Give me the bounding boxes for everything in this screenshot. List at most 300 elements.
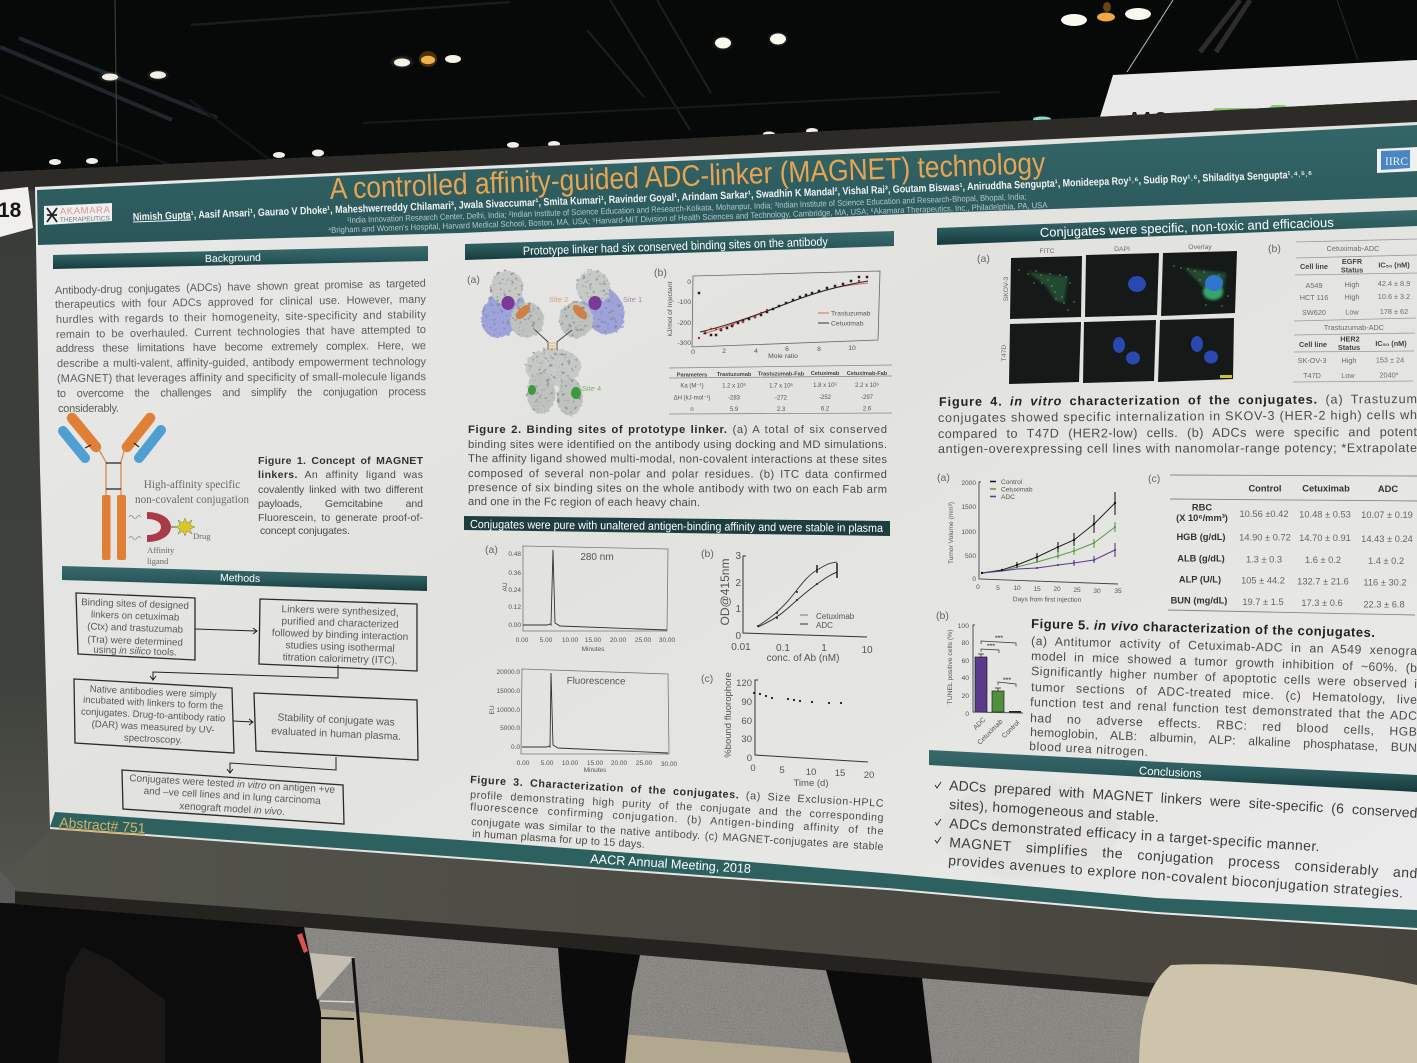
figure 2b: parameters table: -272 [775,396,788,402]
figure 4b: IC50 tables: 42.4 ± 8.9 [1378,279,1410,288]
figure 3a: 280 nm chromatogram: 5.00 [540,637,553,644]
background paragraph: therapeutics with four ADCs approved for clinical use. However, many [55,294,427,311]
section heading: Methods: Methods [220,572,260,585]
figure 3a: 280 nm chromatogram: 0.00 [508,622,521,629]
background paragraph: to overcome the challenges and simplify the conjugation process [57,386,427,400]
figure 3 caption: fluorescence confirming conjugation. (b) Antigen-binding affinity of the [470,801,884,838]
table number tag [0,187,33,237]
figure 2b: ITC chart: -200 [677,320,691,327]
figure 3 caption: conjugate was similar to the native antibody. (c) MAGNET-conjugates are stable [471,816,884,853]
figure 3c: plasma stability scatter: Time (d) [793,778,829,789]
figure 3a: 280 nm chromatogram: AU [502,582,509,592]
conclusions list [935,777,1417,901]
figure 4 caption: conjugates showed specific internalization in SKOV-3 (HER-2 high) cells wh [938,408,1417,425]
section heading: Conjugates were pure: Conjugates were pure with unaltered antigen-binding affinity and were stable in plasma [470,518,884,535]
figure 5a: tumor volume chart: 25 [1073,587,1081,594]
background sign: AAC [1128,109,1167,129]
figure 2b: ITC chart: kJ/mol of Injectant [667,282,674,336]
section heading: Conjugates specific: Conjugates were specific, non-toxic and efficacious [1040,215,1334,240]
figure 4b: IC50 tables: High [1341,356,1357,365]
figure 1: MAGNET linker concept diagram: Drug [193,531,211,541]
figure 5c: hematology table: 14.90 ± 0.72 [1239,532,1291,542]
figure 5 caption: model in mice showed a tumor growth inhibition of ~60%. (b [1031,649,1417,675]
methods flowchart: Linkers were synthesized, [281,604,399,619]
figure 3a: 280 nm chromatogram: 0.36 [508,570,521,577]
figure 2b: parameters table: Ka (M⁻¹) [680,384,704,390]
figure 1 caption [258,455,424,537]
figure 1: MAGNET linker concept diagram: ligand [147,556,169,566]
figure 3a: fluorescence chromatogram: 10.00 [562,760,579,767]
figure 5 caption: Figure 5. in vivo characterization of the conjugates. [1031,616,1375,640]
figure 1 caption: concept conjugates. [260,525,350,537]
logo: IIRC [1377,147,1417,173]
methods flowchart: (Tra) were determined [87,634,183,649]
figure 2b: parameters table: 2.3 [777,407,786,413]
figure 2b: parameters table: 2.2 x 10⁶ [855,382,879,389]
folding chair frame [310,953,362,1063]
figure 5 caption: tumor sections of ADC-treated mice. (c) Hematology, live [1031,680,1417,707]
figure 3b: binding curve: Cetuximab [816,612,855,621]
figure 1: MAGNET linker concept diagram [63,418,249,566]
figure 5 caption: blood urea nitrogen. [1029,739,1148,759]
figure 4b: IC50 tables: 10.6 ± 3.2 [1378,292,1410,301]
figure 2b: parameters table: Trastuzumab [717,372,752,378]
header banner [37,125,1417,245]
figure 3b: binding curve: OD@415nm [718,559,732,625]
figure 2b: ITC chart: Cetuximab [831,320,864,328]
figure 3a: 280 nm chromatogram: 10.00 [562,637,579,644]
figure 5 caption: (a) Antitumor activity of Cetuximab-ADC in an A549 xenogra [1031,634,1417,658]
figure 5a: tumor volume chart [937,472,1122,604]
figure 1 caption: Fluorescein, to generate proof-of- [258,512,424,524]
logo: Akamara: AKAMARA [60,205,111,217]
figure 2a: antibody structure: Site 4 [582,384,601,393]
figure 5a: tumor volume chart: Cetuximab [1001,486,1033,494]
figure 4b: IC50 tables: IC₅₀ (nM) [1378,260,1410,270]
figure 4b: IC50 tables: Cetuximab-ADC [1327,244,1379,253]
figure 4 caption: compared to T47D (HER2-low) cells. (b) ADCs were specific and potent [938,425,1417,441]
figure 1 caption: covalently linked with two different [258,484,423,496]
figure 5c: hematology table: 105 ± 44.2 [1241,576,1285,586]
figure 3a: fluorescence chromatogram: 0.0 [511,744,520,751]
figure 5b: TUNEL bar chart: Cetuximab [976,718,1005,746]
figure 2b: ITC chart: 0 [687,279,691,286]
section heading: Methods [62,566,427,591]
figure 3a: 280 nm chromatogram: 0.48 [508,551,521,558]
poster sheet [35,122,1417,930]
figure 5c: hematology table: 1.4 ± 0.2 [1368,556,1404,566]
figure 2b: ITC chart: 2 [722,348,726,355]
figure 4b: IC50 tables: High [1344,292,1360,302]
figure 2b: parameters table: ΔH (kJ·mol⁻¹) [674,396,710,402]
figure 2b: parameters table: 5.9 [730,407,739,413]
figure 3c: plasma stability scatter: 30 [741,734,752,745]
methods flowchart: followed by binding interaction [272,628,408,643]
figure 4b: IC50 tables: HER2 [1340,334,1360,344]
figure 4b: IC50 tables: A549 [1305,281,1323,290]
figure 5c: hematology table: HGB (g/dL) [1176,532,1226,542]
methods flowchart: purified and characterized [281,616,399,631]
figure 5c: hematology table: ADC [1378,484,1398,494]
figure 5b: TUNEL bar chart: Control [1001,719,1022,740]
figure 5c: hematology table: 17.3 ± 0.6 [1301,598,1343,608]
figure 1: MAGNET linker concept diagram: High-affinity specific [144,479,240,491]
figure 5b: TUNEL bar chart: 20 [961,693,969,700]
affiliations line 1: ¹India Innovation Research Center, Delhi, India; ²Indian Institute of Science Education and Research-Kolkata, Mohanpur, India; ³Indian Institute of Science Education and Research-Bhopal, Bhopal, India; [347,191,1027,225]
figure 5c: hematology table: 116 ± 30.2 [1363,578,1407,588]
figure 3a: 280 nm chromatogram: (a) [485,544,498,556]
floor tile [321,1009,855,1063]
figure 3a: fluorescence chromatogram: 10000.0 [496,707,520,714]
figure 5a: tumor volume chart: 30 [1093,588,1101,595]
figure 3a: fluorescence chromatogram: Minutes [584,767,607,774]
methods flowchart: using in silico tools. [93,645,177,658]
figure 5c: hematology table: (c) [1148,473,1160,485]
affiliations line 2: ⁴Brigham and Women's Hospital, Harvard Medical School, Boston, MA, USA; ⁵Harvard-MIT Division of Health Sciences and Technology, Cambridge, MA, USA; ⁶Akamara Therapeutics, Inc., Philadelphia, PA, USA [328,200,1048,235]
figure 2 caption [468,424,887,509]
ceiling background [0,0,1417,180]
figure 4b: IC50 tables: (b) [1268,243,1281,255]
figure 3a: 280 nm chromatogram: 30.00 [659,637,676,644]
figure 5c: hematology table: BUN (mg/dL) [1171,596,1227,606]
figure 5c: hematology table: 10.48 ± 0.53 [1299,510,1351,520]
figure 5b: TUNEL bar chart: 80 [961,640,969,647]
figure 5 caption: Significantly higher number of apoptotic cells were observed i [1031,664,1417,691]
figure 4b: IC50 tables: T47D [1303,371,1321,380]
figure 3 caption: in human plasma for up to 15 days. [472,828,645,851]
figure 3a: 280 nm chromatogram: 0.00 [516,637,529,644]
figure 4a: microscopy panels: T47D [1001,345,1008,361]
section heading: Background: Background [205,252,261,265]
figure 3c: plasma stability scatter: 10 [806,767,816,778]
background paragraph: considerably. [58,403,119,415]
figure 2b: ITC chart: -100 [677,299,691,306]
figure 5a: tumor volume chart: (a) [937,472,950,484]
meeting name: AACR Annual Meeting, 2018 [590,851,751,876]
figure 5b: TUNEL bar chart: (b) [936,610,949,622]
figure 3a: 280 nm chromatogram: 20.00 [610,637,627,644]
figure 5a: tumor volume chart: Days from first injection [1013,596,1082,604]
figure 4b: IC50 tables: Cell line [1299,340,1327,349]
background paragraph: hurdles with regards to their homogeneity, site-specificity and stability [56,309,427,326]
background paragraph: remain to be overhauled. Current technologies that have attempted to [56,324,426,341]
section heading: Conclusions: Conclusions [1139,765,1202,781]
methods flowchart: Stability of conjugate was [277,712,395,729]
figure 4b: IC50 tables: High [1344,280,1360,289]
figure 4b: IC50 tables: HCT 116 [1300,293,1328,302]
figure 2b: parameters table: Trastuzumab-Fab [758,372,805,378]
methods flowchart: Conjugates were tested in vitro on antigen +ve [129,773,336,796]
figure 3c: plasma stability scatter: 0 [750,763,756,774]
figure 5 caption: hemoglobin, ALB: albumin, ALP: alkaline phosphatase, BUN [1030,725,1417,755]
figure 5c: hematology table: Control [1248,484,1282,494]
figure 5c: hematology table: 22.3 ± 6.8 [1363,600,1405,610]
figure 3b: binding curve: 1 [821,643,827,654]
methods flowchart: (Ctx) and trastuzumab [87,621,183,636]
figure 5c: hematology table: 14.70 ± 0.91 [1299,533,1351,543]
methods flowchart: studies using isothermal [285,640,395,655]
logo: Akamara [44,203,112,225]
figure 3c: plasma stability scatter: 90 [741,697,752,708]
figure 5a: tumor volume chart: 2000 [961,480,976,487]
figure 4b: IC50 tables: 153 ± 24 [1376,356,1404,364]
figure 3a: fluorescence chromatogram: EU [489,705,496,715]
figure 3 caption: Figure 3. Characterization of the conjugates. (a) Size Exclusion-HPLC [470,774,884,810]
figure 3a: fluorescence chromatogram: 25.00 [636,760,653,767]
figure 5a: tumor volume chart: 1000 [961,529,976,536]
figure 4a: microscopy panels: DAPI [1114,246,1130,253]
ceiling lights [49,2,1151,165]
figure 5a: tumor volume chart: 20 [1053,586,1061,593]
figure 4b: IC50 tables: SK-OV-3 [1298,356,1326,365]
figure 3b: binding curve: conc. of Ab (nM) [767,653,839,664]
figure 3c: plasma stability scatter: %bound fluorophore [723,672,734,758]
figure 2a: antibody structure [467,270,642,416]
figure 2a: antibody structure: Site 1 [623,295,642,304]
figure 3a: 280 nm chromatogram: 25.00 [635,637,652,644]
figure 4a: microscopy panels: FITC [1039,248,1055,255]
section heading: Conclusions [929,750,1417,792]
figure 2b: parameters table: -252 [819,395,832,401]
figure 5c: hematology table: RBC [1192,502,1212,512]
figure 3c: plasma stability scatter: (c) [701,673,713,685]
figure 3c: plasma stability scatter [701,672,874,789]
methods flowchart: Native antibodies were simply [89,684,217,701]
methods flowchart: spectroscopy. [124,733,183,746]
figure 3a: fluorescence chromatogram: 15.00 [587,760,604,767]
person's legs [558,947,932,1063]
figure 5a: tumor volume chart: 0 [972,576,976,583]
figure 2 caption: and one in the Fc region of each heavy chain. [468,496,700,509]
figure 4b: IC50 tables: 2040* [1379,370,1399,380]
figure 5c: hematology table: 19.7 ± 1.5 [1242,597,1284,607]
figure 5 caption: function test and renal function test demonstrated that the ADC [1030,695,1417,723]
figure 5a: tumor volume chart: Control [1001,479,1023,486]
figure 2b: parameters table: 1.2 x 10⁶ [722,382,746,390]
figure 3c: plasma stability scatter: 120 [736,678,752,689]
background paragraph: Antibody-drug conjugates (ADCs) have shown great promise as targeted [55,278,426,297]
figure 3a: 280 nm chromatogram: 0.12 [508,604,521,611]
figure 4b: IC50 tables: Low [1345,308,1359,316]
methods flowchart [74,593,418,824]
footer banner [50,812,1417,928]
background paragraph: describe a multi-valent, affinity-guided, antibody empowerment technology [57,356,427,370]
methods flowchart: (DAR) was measured by UV- [91,719,215,736]
figure 2b: ITC chart: 4 [754,348,758,355]
section heading: Conjugates specific [937,210,1417,245]
figure 3a: fluorescence chromatogram: 20000.0 [496,669,520,676]
figure 5a: tumor volume chart: 10 [1013,585,1021,592]
figure 2 caption: presence of six binding sites on the whole antibody with two on each Fab arm [468,482,887,496]
figure 5a: tumor volume chart: 1500 [961,504,976,511]
figure 5a: tumor volume chart: 35 [1114,588,1122,595]
figure 3b: binding curve: 1 [735,604,741,615]
figure 3a: fluorescence chromatogram: 0.00 [517,760,530,767]
figure 3b: binding curve: 10 [861,645,873,656]
figure 2b: parameters table: 2.6 [863,406,872,412]
section heading: Background [53,246,428,269]
figure 2b: ITC chart: Mole ratio [768,353,798,360]
figure 3a: 280 nm chromatogram: 0.24 [508,587,521,594]
figure 4 caption: Figure 4. in vitro characterization of the conjugates. (a) Trastuzum [939,392,1417,409]
methods flowchart: and –ve cell lines and in lung carcinoma [143,786,321,807]
conclusions list: ADCs prepared with MAGNET linkers were site-specific (6 conserved [949,777,1417,821]
figure 2b: ITC chart: (b) [654,267,667,279]
figure 2b: parameters table: Parameters [677,372,707,378]
figure 1 caption: Figure 1. Concept of MAGNET [258,455,424,467]
conclusions list: ADCs demonstrated efficacy in a target-specific manner. [949,815,1320,854]
figure 4a: microscopy panels: (a) [977,253,990,265]
figure 4b: IC50 tables: Trastuzumab-ADC [1324,323,1384,332]
figure 2b: parameters table: -297 [861,395,874,401]
figure 5c: hematology table: 14.43 ± 0.24 [1361,534,1413,544]
figure 4b: IC50 tables: Low [1341,371,1355,380]
methods flowchart: conjugates. Drug-to-antibody ratio [81,706,226,725]
figure 5b: TUNEL bar chart: 60 [961,658,969,665]
figure 3c: plasma stability scatter: 15 [835,768,845,779]
figure 5a: tumor volume chart: ADC [1001,494,1015,501]
figure 2b: parameters table: 6.2 [821,406,830,412]
figure 2 caption: binding sites were identified on the antibody using docking and MD simulations. [468,439,887,451]
figure 3a: 280 nm chromatogram [485,544,676,653]
figure 3a: fluorescence chromatogram: 20.00 [611,760,628,767]
figure 3c: plasma stability scatter: 60 [741,716,752,727]
figure 4a: microscopy panels: Overlay [1188,244,1212,251]
figure 3b: binding curve: (b) [701,548,714,560]
figure 2b: ITC chart: Trastuzumab [831,310,871,318]
figure 2b: parameters table: Cetuximab-Fab [847,371,888,377]
figure 2b: parameters table: Cetuximab [811,371,840,377]
figure 5b: TUNEL bar chart: *** [1003,677,1011,684]
figure 3b: binding curve: 0.01 [731,642,751,653]
figure 5b: TUNEL bar chart: 100 [958,623,969,630]
figure 4b: IC50 tables: Status [1341,266,1363,274]
figure 4b: IC50 tables: SW620 [1302,308,1326,317]
figure 2 caption: The affinity ligand showed multi-modal, non-covalent interactions at these sites [468,453,887,466]
figure 3a: 280 nm chromatogram: Minutes [582,646,605,653]
figure 5b: TUNEL bar chart [936,610,1023,746]
figure 5 caption [1029,616,1417,759]
figure 2b: ITC chart: 0 [691,349,695,356]
figure 5c: hematology table: 132.7 ± 21.6 [1297,576,1349,586]
figure 2b: ITC chart: 10 [848,345,856,352]
figure 3b: binding curve: 0 [735,631,741,642]
figure 3b: binding curve: 3 [735,551,741,562]
figure 3c: plasma stability scatter: 5 [779,765,785,776]
figure 4b: IC50 tables: 178 ± 62 [1380,307,1408,316]
section heading: Prototype linker [465,231,894,260]
figure 4b: IC50 tables: Cell line [1300,262,1328,271]
methods flowchart: incubated with linkers to form the [83,695,223,712]
figure 3a: fluorescence chromatogram: 15000.0 [496,688,520,695]
figure 3a: fluorescence chromatogram [489,669,678,774]
figure 2b: ITC chart: 6 [785,346,789,353]
background paragraph [55,278,427,415]
figure 5c: hematology table: ALP (U/L) [1179,574,1221,584]
conclusions list: provides avenues to explore non-covalent bioconjugation strategies. [948,852,1404,901]
figure 2a: antibody structure: Site 2 [549,295,568,304]
conclusions list: sites), homogeneous and stable. [949,796,1159,825]
figure 5c: hematology table: 10.56 ±0.42 [1239,509,1289,519]
figure 5b: TUNEL bar chart: *** [995,635,1003,642]
figure 2b: parameters table: 1.8 x 10⁶ [813,382,837,389]
figure 2b: parameters table [669,365,892,414]
figure 3b: binding curve: 2 [735,578,741,589]
figure 3 caption [470,774,884,853]
figure 3c: plasma stability scatter: 0 [747,753,752,764]
section heading: Prototype linker: Prototype linker had six conserved binding sites on the antibody [523,234,828,258]
logo: IIRC: IIRC [1385,156,1408,168]
figure 2b: parameters table: n [690,407,694,413]
figure 3a: fluorescence chromatogram: Fluorescence [567,676,626,687]
title: A controlled affinity-guided ADC-linker (MAGNET) technology [329,147,1046,206]
figure 5a: tumor volume chart: 500 [965,553,976,560]
figure 5a: tumor volume chart: Tumor Volume (mm³) [948,502,955,564]
figure 4b: IC50 tables: Status [1338,343,1360,352]
figure 5a: tumor volume chart: 0 [976,584,980,591]
methods flowchart: evaluated in human plasma. [271,726,401,743]
figure 4a: microscopy panels: SKOV-3 [1003,277,1010,301]
figure 1: MAGNET linker concept diagram: non-covalent conjugation [135,494,249,506]
figure 5c: hematology table: (X 10⁶/mm³) [1176,513,1228,523]
person at left foreground [0,903,321,1063]
figure 2b: parameters table: -283 [728,396,741,402]
methods flowchart: Binding sites of designed [81,597,189,612]
figure 2b: parameters table: 1.7 x 10⁶ [769,382,793,390]
figure 2b: ITC chart: -300 [677,340,691,347]
figure 3b: binding curve: 0.1 [776,643,790,654]
conclusions list: MAGNET simplifies the conjugation process considerably and [949,834,1417,881]
figure 4b: IC50 tables [1268,239,1417,382]
floor carpet [300,920,1417,1063]
figure 5c: hematology table: 1.6 ± 0.2 [1305,555,1341,565]
figure 2b: ITC chart [654,267,880,360]
figure 3 caption: profile demonstrating high purity of the conjugate and the corresponding [470,789,884,824]
background paragraph: address these limitations have become extremely complex. Here, we [56,340,426,355]
figure 3a: 280 nm chromatogram: 15.00 [585,637,602,644]
figure 3a: fluorescence chromatogram: 30.00 [661,761,678,768]
background sign [1100,60,1417,117]
foreground chair back [1139,964,1417,1063]
figure 5c: hematology table: Cetuximab [1302,484,1350,494]
background paragraph: (MAGNET) that leverages affinity and specificity of small-molecule ligands [57,371,427,385]
figure 5c: hematology table [1148,473,1417,615]
figure 5c: hematology table: ALB (g/dL) [1177,554,1225,564]
methods flowchart: titration calorimetry (ITC). [282,652,398,667]
figure 5b: TUNEL bar chart: TUNEL positive cells (%) [947,630,954,704]
figure 3a: fluorescence chromatogram: 5.00 [541,760,554,767]
figure 5a: tumor volume chart: 5 [996,585,1000,592]
figure 5a: tumor volume chart: 15 [1033,586,1041,593]
figure 5b: TUNEL bar chart: 40 [961,675,969,682]
figure 2a: antibody structure: (a) [467,274,480,286]
logo: Akamara: THERAPEUTICS [60,215,111,224]
figure 5c: hematology table: 1.3 ± 0.3 [1246,554,1282,564]
figure 4 caption: antigen-overexpressing cell lines with nanomolar-range potency; *Extrapolate [938,441,1417,456]
figure 3b: binding curve: ADC [816,621,833,630]
figure 5 caption: had no adverse effects. RBC: red blood cells, HGB [1030,711,1417,739]
figure 4b: IC50 tables: IC₅₀ (nM) [1375,339,1407,348]
figure 3a: 280 nm chromatogram: 280 nm [580,552,614,563]
methods flowchart: linkers on cetuximab [91,609,179,624]
figure 3b: binding curve [701,548,873,664]
figure 3c: plasma stability scatter: 20 [864,770,874,781]
figure 1: MAGNET linker concept diagram: Affinity [147,545,175,555]
figure 2 caption: Figure 2. Binding sites of prototype linker. (a) A total of six conserved [468,424,887,436]
figure 5b: TUNEL bar chart: *** [987,643,995,650]
figure 4 caption [938,392,1417,456]
figure 5b: TUNEL bar chart: ADC [972,716,987,732]
